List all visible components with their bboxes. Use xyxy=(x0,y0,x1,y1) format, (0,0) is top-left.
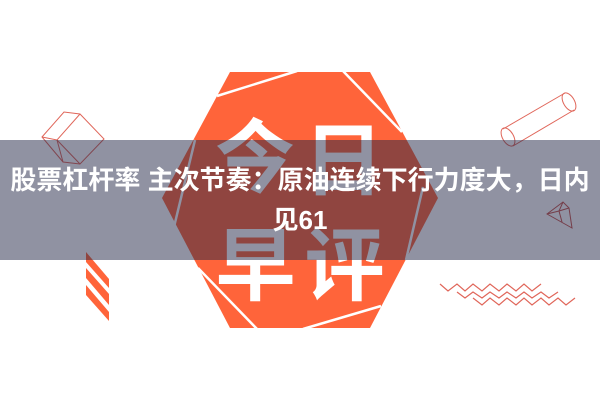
icon: wireframe cylinder xyxy=(498,91,579,148)
title xyxy=(10,165,590,235)
title: 股票杠杆率 主次节奏：原油连续下行力度大，日内 xyxy=(10,165,590,195)
badge text: 今日早评: 日 xyxy=(304,97,384,213)
icon: orange diagonal stripes xyxy=(86,252,109,321)
icon: wireframe gem xyxy=(547,202,572,228)
badge text: 今日早评: 今 xyxy=(215,94,295,210)
badge text: 今日早评: 早 xyxy=(216,202,296,318)
icon: orange hexagon badge xyxy=(162,71,438,329)
translucent title band xyxy=(0,140,600,260)
title: 见61 xyxy=(273,205,327,235)
badge text: 今日早评: 评 xyxy=(304,202,384,318)
badge text: 今日早评 xyxy=(215,94,384,318)
icon: wireframe cube xyxy=(42,112,104,164)
icon: zigzag lines xyxy=(440,284,575,305)
